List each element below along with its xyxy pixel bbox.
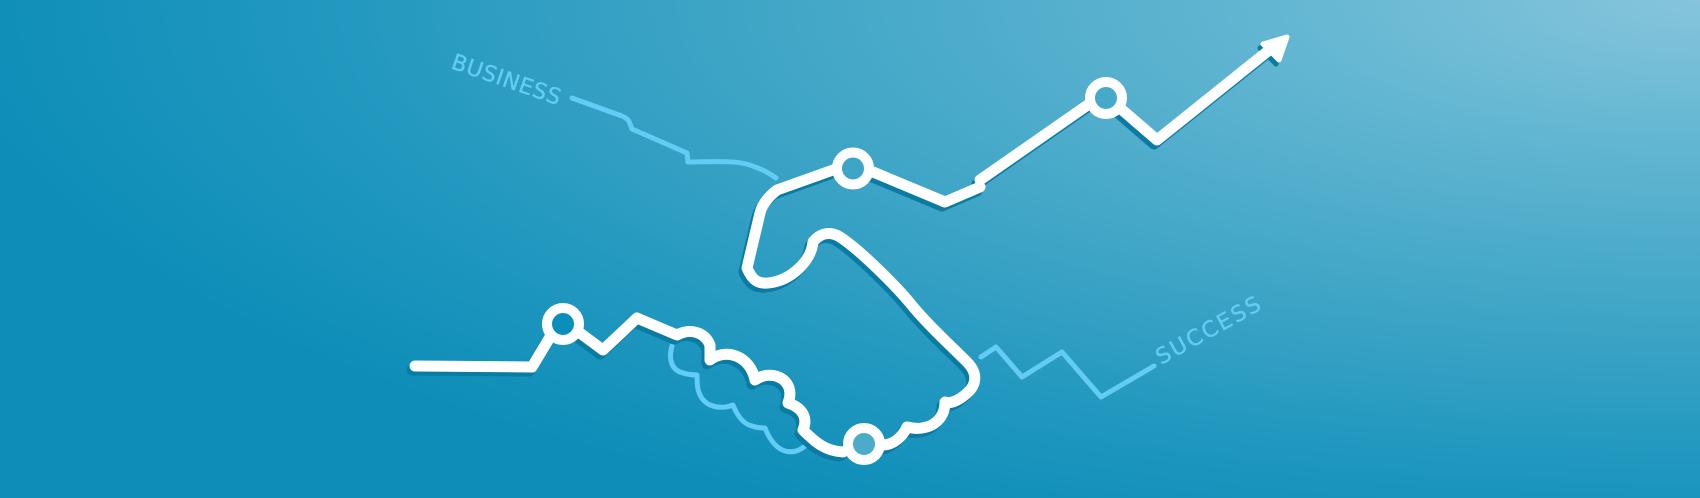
- white chart line: lower hand: [415, 318, 843, 452]
- light line: success connector: [981, 347, 1154, 397]
- node: upper right: [1090, 82, 1122, 114]
- label: BUSINESS: BUSINESS: [448, 50, 564, 111]
- node: bottom: [848, 428, 880, 460]
- light line: business connector: [572, 98, 776, 178]
- white chart line: rising arrow: [873, 47, 1273, 202]
- icon: arrowhead: [1263, 37, 1287, 60]
- label: SUCCESS: SUCCESS: [1152, 292, 1265, 370]
- node: upper: [837, 152, 869, 184]
- light line: fingers outline: [671, 346, 805, 452]
- white chart line: upper hand: [747, 170, 975, 445]
- node: lower left: [547, 308, 579, 340]
- chart shadow: [412, 41, 1284, 456]
